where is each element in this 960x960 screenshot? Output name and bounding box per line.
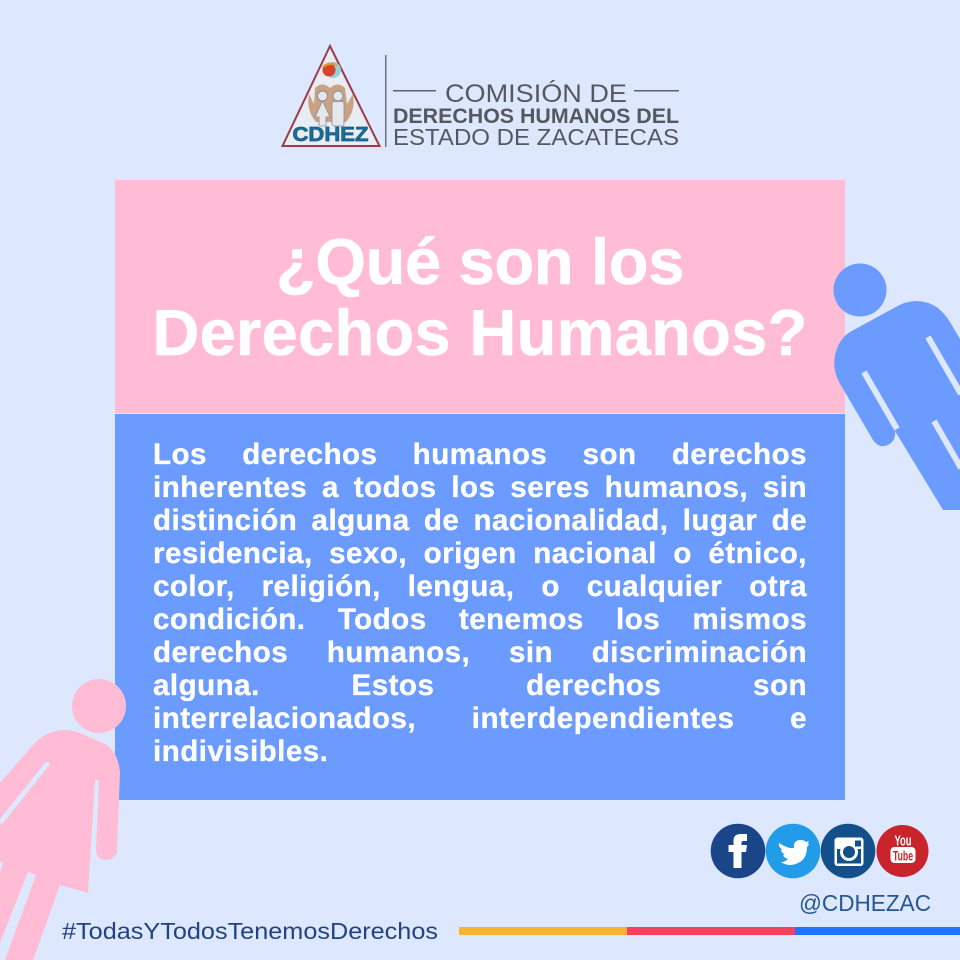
title xyxy=(152,225,808,368)
panel: blue body panel xyxy=(115,414,845,800)
tricolor bar xyxy=(459,927,960,935)
text: Derechos Humanos del: DERECHOS HUMANOS DEL xyxy=(393,105,679,128)
text block: definition: inherentes a todos los seres humanos, sin xyxy=(153,471,807,504)
logo: CDHEZ triangle emblem xyxy=(282,46,380,146)
text block: definition: distinción alguna de nacionalidad, lugar de xyxy=(153,504,807,537)
text: social handle: @CDHEZAC xyxy=(799,890,931,916)
icon: instagram xyxy=(821,824,875,878)
text: hashtag: #TodasYTodosTenemosDerechos xyxy=(62,918,438,944)
icon: hands and two people xyxy=(308,84,354,126)
title: ¿Qué son los xyxy=(276,225,684,298)
text block: definition: residencia, sexo, origen nacional o étnico, xyxy=(153,537,807,570)
icon: facebook xyxy=(711,824,765,878)
text: Comisión de: COMISIÓN DE xyxy=(445,79,627,108)
text block: definition: color, religión, lengua, o cualquier otra xyxy=(153,570,807,603)
icon: youtube xyxy=(876,825,928,877)
divider: logo separator xyxy=(385,55,386,147)
icon: sun emblem xyxy=(322,62,341,78)
title: Derechos Humanos? xyxy=(152,296,808,368)
text block: definition: derechos humanos, sin discriminación xyxy=(153,636,807,669)
text block: definition: condición. Todos tenemos los mismos xyxy=(153,603,807,636)
icon: pink woman figure xyxy=(0,679,126,960)
text block: definition xyxy=(153,438,807,768)
logo wordmark: CDHEZ: CDHEZ xyxy=(292,124,368,146)
text block: definition: indivisibles. xyxy=(153,735,328,768)
text block: definition: alguna. Estos derechos son xyxy=(153,669,807,702)
text block: definition: Los derechos humanos son derechos xyxy=(153,438,807,470)
text: Estado de Zacatecas: ESTADO DE ZACATECAS xyxy=(393,124,679,150)
icon: youtube: Tube xyxy=(893,848,913,864)
text block: definition: interrelacionados, interdependientes e xyxy=(153,702,807,735)
panel: pink title panel xyxy=(115,180,845,413)
icon: blue man figure xyxy=(834,264,960,510)
icon: youtube: You xyxy=(894,832,912,850)
icon: twitter xyxy=(766,824,820,878)
